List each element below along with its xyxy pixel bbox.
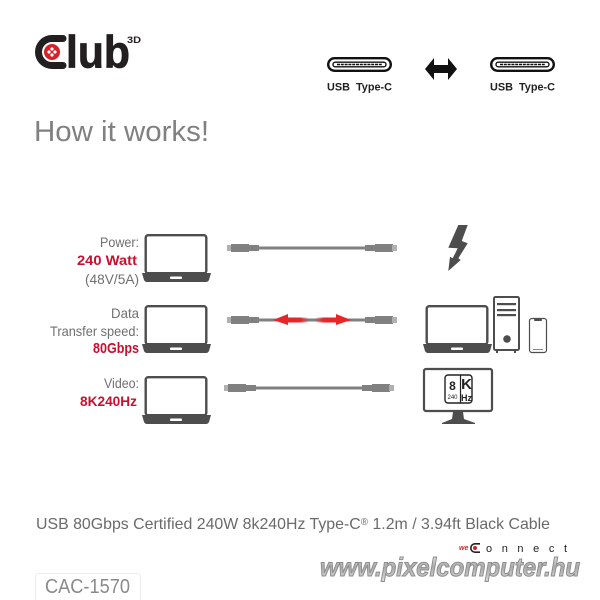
label: power: (48V/5A)	[85, 271, 139, 287]
icon: 8K monitor: K	[461, 376, 472, 393]
logo: Club 3D: 3D	[127, 35, 142, 45]
label: video: Video:	[104, 375, 139, 391]
label: power	[77, 234, 139, 287]
label: data transfer speed: 80Gbps	[93, 340, 139, 357]
product title: 1.2m / 3.94ft Black Cable	[368, 516, 550, 533]
label: data transfer speed	[50, 305, 139, 357]
icon: USB Type-C right: USB Type-C	[490, 82, 555, 94]
icon: desktop tower	[494, 297, 519, 353]
icon: 8K monitor: 240	[447, 395, 458, 401]
logo: Club 3D	[38, 26, 142, 78]
icon: 8K monitor	[424, 369, 492, 424]
heading: How it works!: How it works!	[34, 116, 209, 148]
watermark: pixelcomputer.hu: www.pixelcomputer.hu	[320, 552, 580, 582]
icon: 8K monitor: Hz	[461, 393, 472, 403]
icon: USB Type-C right	[490, 58, 555, 94]
brand: weConnect: onnect	[486, 543, 567, 555]
icon: laptop data	[142, 306, 211, 353]
icon: lightning bolt	[448, 225, 468, 271]
cable: video	[224, 384, 394, 392]
product title: ®	[361, 517, 369, 528]
icon: double arrow	[425, 58, 457, 80]
product code badge: CAC-1570	[45, 576, 130, 598]
label: power: Power:	[100, 234, 139, 250]
icon: laptop device	[423, 306, 492, 353]
label: data transfer speed: Data	[111, 305, 139, 321]
label: power: 240 Watt	[77, 252, 137, 268]
icon: USB Type-C left: USB Type-C	[327, 82, 392, 94]
brand: weConnect: we	[459, 545, 468, 552]
cable: data with red arrows	[227, 314, 397, 325]
icon: 8K monitor: 8	[449, 379, 456, 393]
label: data transfer speed: Transfer speed:	[50, 323, 139, 339]
label: video	[80, 375, 139, 409]
icon: laptop video	[142, 377, 211, 424]
logo: Club 3D: lub	[66, 26, 130, 78]
product title: USB 80Gbps Certified 240W 8k240Hz Type-C	[36, 516, 363, 533]
icon: USB Type-C left	[327, 58, 392, 94]
icon: smartphone	[530, 318, 546, 352]
cable: power	[227, 244, 397, 252]
icon: laptop power	[142, 235, 211, 282]
label: video: 8K240Hz	[80, 393, 137, 409]
